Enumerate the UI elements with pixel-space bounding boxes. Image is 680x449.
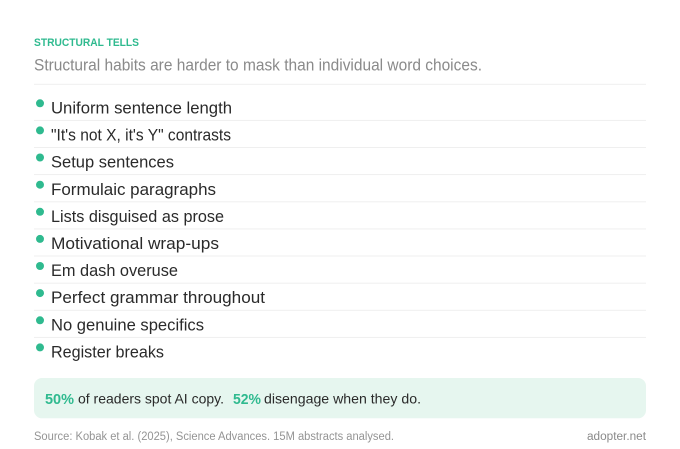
list item: lists disguised as prose: Lists disguised as prose	[51, 207, 224, 226]
panel: list of structural tells	[34, 98, 646, 362]
stat text: readers spot AI copy: of readers spot AI copy.	[78, 390, 224, 406]
list item: contrasts: "It's not X, it's Y" contrasts	[51, 126, 231, 144]
list item: no genuine specifics: No genuine specifics	[51, 315, 204, 334]
callout: reader statistics	[34, 378, 646, 418]
list item: motivational wrap-ups: Motivational wrap-ups	[51, 234, 219, 253]
list item: register breaks: Register breaks	[51, 342, 164, 362]
list item: setup sentences: Setup sentences	[51, 153, 174, 172]
stat: 50 percent: 50%	[45, 391, 74, 408]
list item: perfect grammar throughout: Perfect grammar throughout	[51, 288, 265, 307]
stat: 52 percent: 52%	[233, 391, 261, 408]
title: STRUCTURAL TELLS	[34, 37, 139, 49]
list item: formulaic paragraphs: Formulaic paragraphs	[51, 180, 216, 199]
list item: uniform sentence length: Uniform sentence length	[51, 98, 232, 117]
subtitle: Structural habits are harder to mask than individual word choices.	[34, 56, 482, 74]
source note: Source: Kobak et al. (2025), Science Advances. 15M abstracts analysed.	[34, 431, 394, 443]
stat text: disengage: disengage when they do.	[264, 390, 421, 406]
list item: em dash overuse: Em dash overuse	[51, 261, 178, 280]
brand credit: adopter.net	[587, 431, 647, 443]
